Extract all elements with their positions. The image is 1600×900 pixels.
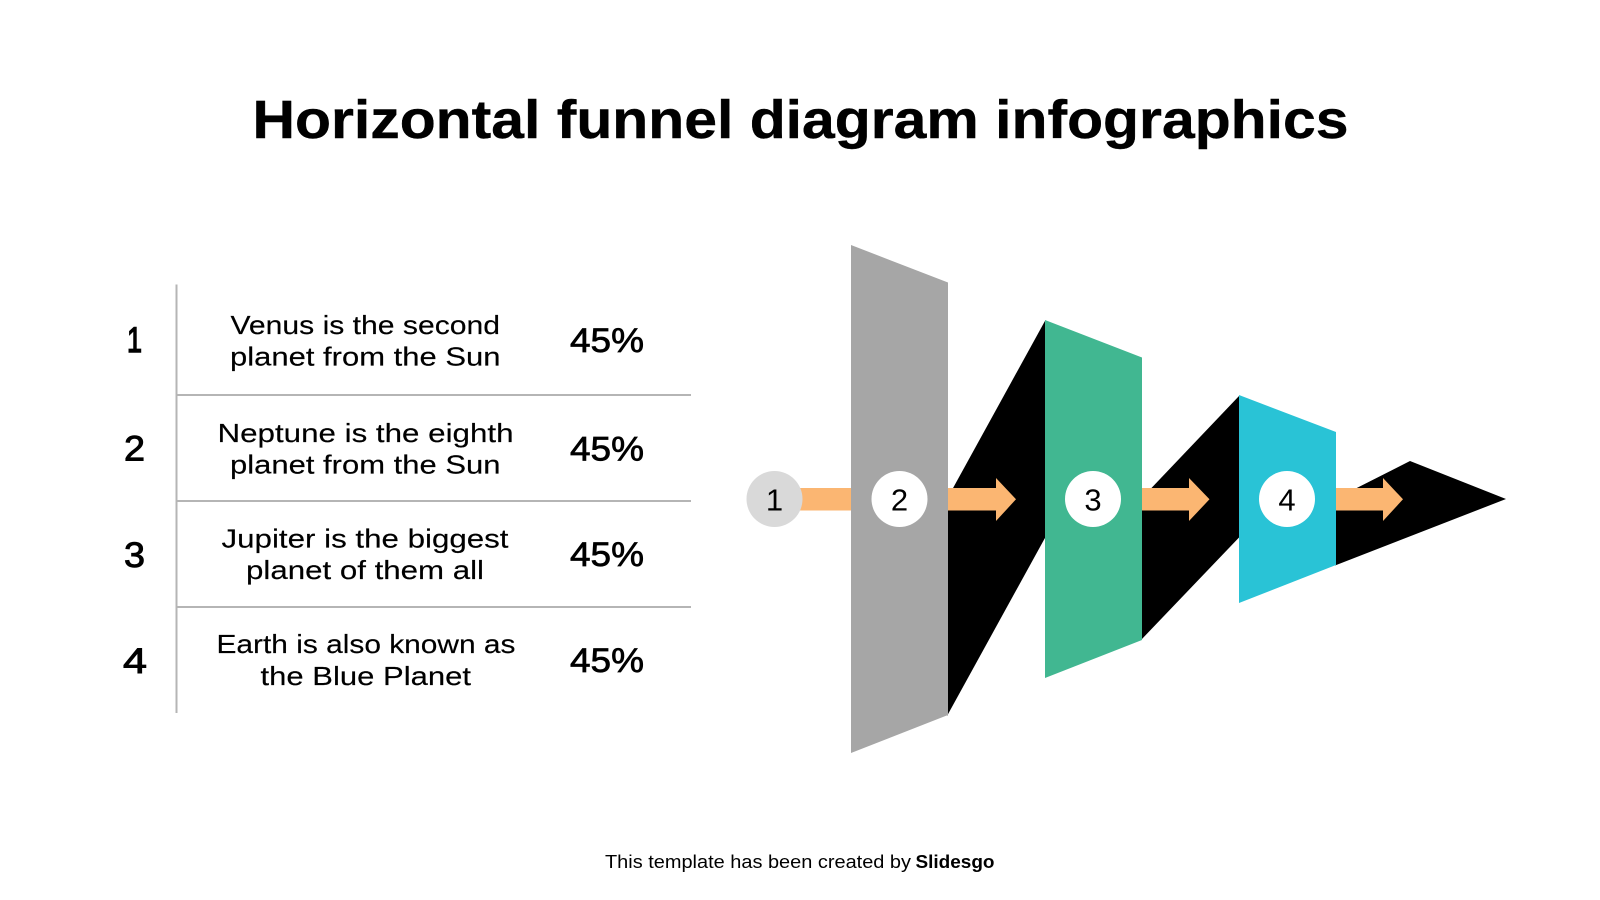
row 1: Venus is the second bbox=[230, 310, 500, 340]
step 1 badge bbox=[746, 471, 802, 527]
arrow: green to teal bbox=[1142, 478, 1210, 521]
row 4: the Blue Planet bbox=[260, 661, 472, 691]
row 4 bbox=[123, 629, 644, 691]
step 1 badge: 1 bbox=[766, 482, 783, 518]
funnel segment: gray bbox=[851, 245, 948, 753]
panel: numbered list table bbox=[123, 284, 691, 713]
row 2: 2 bbox=[124, 430, 145, 468]
row 3: 3 bbox=[124, 536, 145, 575]
row 4: 4 bbox=[123, 642, 147, 681]
funnel connector: black shadow 2 bbox=[1141, 396, 1240, 640]
funnel segment: green bbox=[1045, 320, 1142, 678]
row 2: 45% bbox=[570, 430, 644, 468]
funnel segment: teal bbox=[1239, 395, 1336, 603]
funnel connector: black tip bbox=[1335, 461, 1506, 566]
step 2 badge: 2 bbox=[891, 482, 908, 518]
step 4 badge bbox=[1259, 471, 1315, 527]
step 3 badge bbox=[1065, 471, 1121, 527]
arrow: gray to green bbox=[948, 478, 1016, 521]
funnel connector: black shadow 1 bbox=[947, 320, 1046, 716]
arrow: teal to tip bbox=[1336, 478, 1403, 521]
step 4 badge: 4 bbox=[1278, 482, 1296, 518]
chart: horizontal funnel diagram bbox=[746, 245, 1506, 753]
row 1: planet from the Sun bbox=[230, 342, 500, 372]
row 3: Jupiter is the biggest bbox=[222, 524, 509, 554]
step 2 badge bbox=[872, 471, 928, 527]
step 3 badge: 3 bbox=[1084, 482, 1102, 518]
row 1: 45% bbox=[570, 322, 644, 360]
row 2: planet from the Sun bbox=[230, 450, 500, 480]
row 2: Neptune is the eighth bbox=[218, 418, 514, 448]
footer credit: This template has been created by bbox=[605, 852, 911, 872]
row 1 bbox=[127, 310, 644, 372]
row 2 bbox=[124, 418, 644, 480]
row 1: 1 bbox=[127, 321, 142, 360]
row 3: planet of them all bbox=[246, 555, 484, 585]
title: Horizontal funnel diagram infographics bbox=[252, 90, 1348, 150]
arrow: entry bar bbox=[790, 488, 852, 510]
row 4: Earth is also known as bbox=[216, 629, 516, 659]
row 3: 45% bbox=[570, 536, 644, 574]
row 3 bbox=[124, 524, 644, 585]
row 4: 45% bbox=[570, 642, 644, 680]
footer credit: Slidesgo bbox=[916, 852, 995, 872]
